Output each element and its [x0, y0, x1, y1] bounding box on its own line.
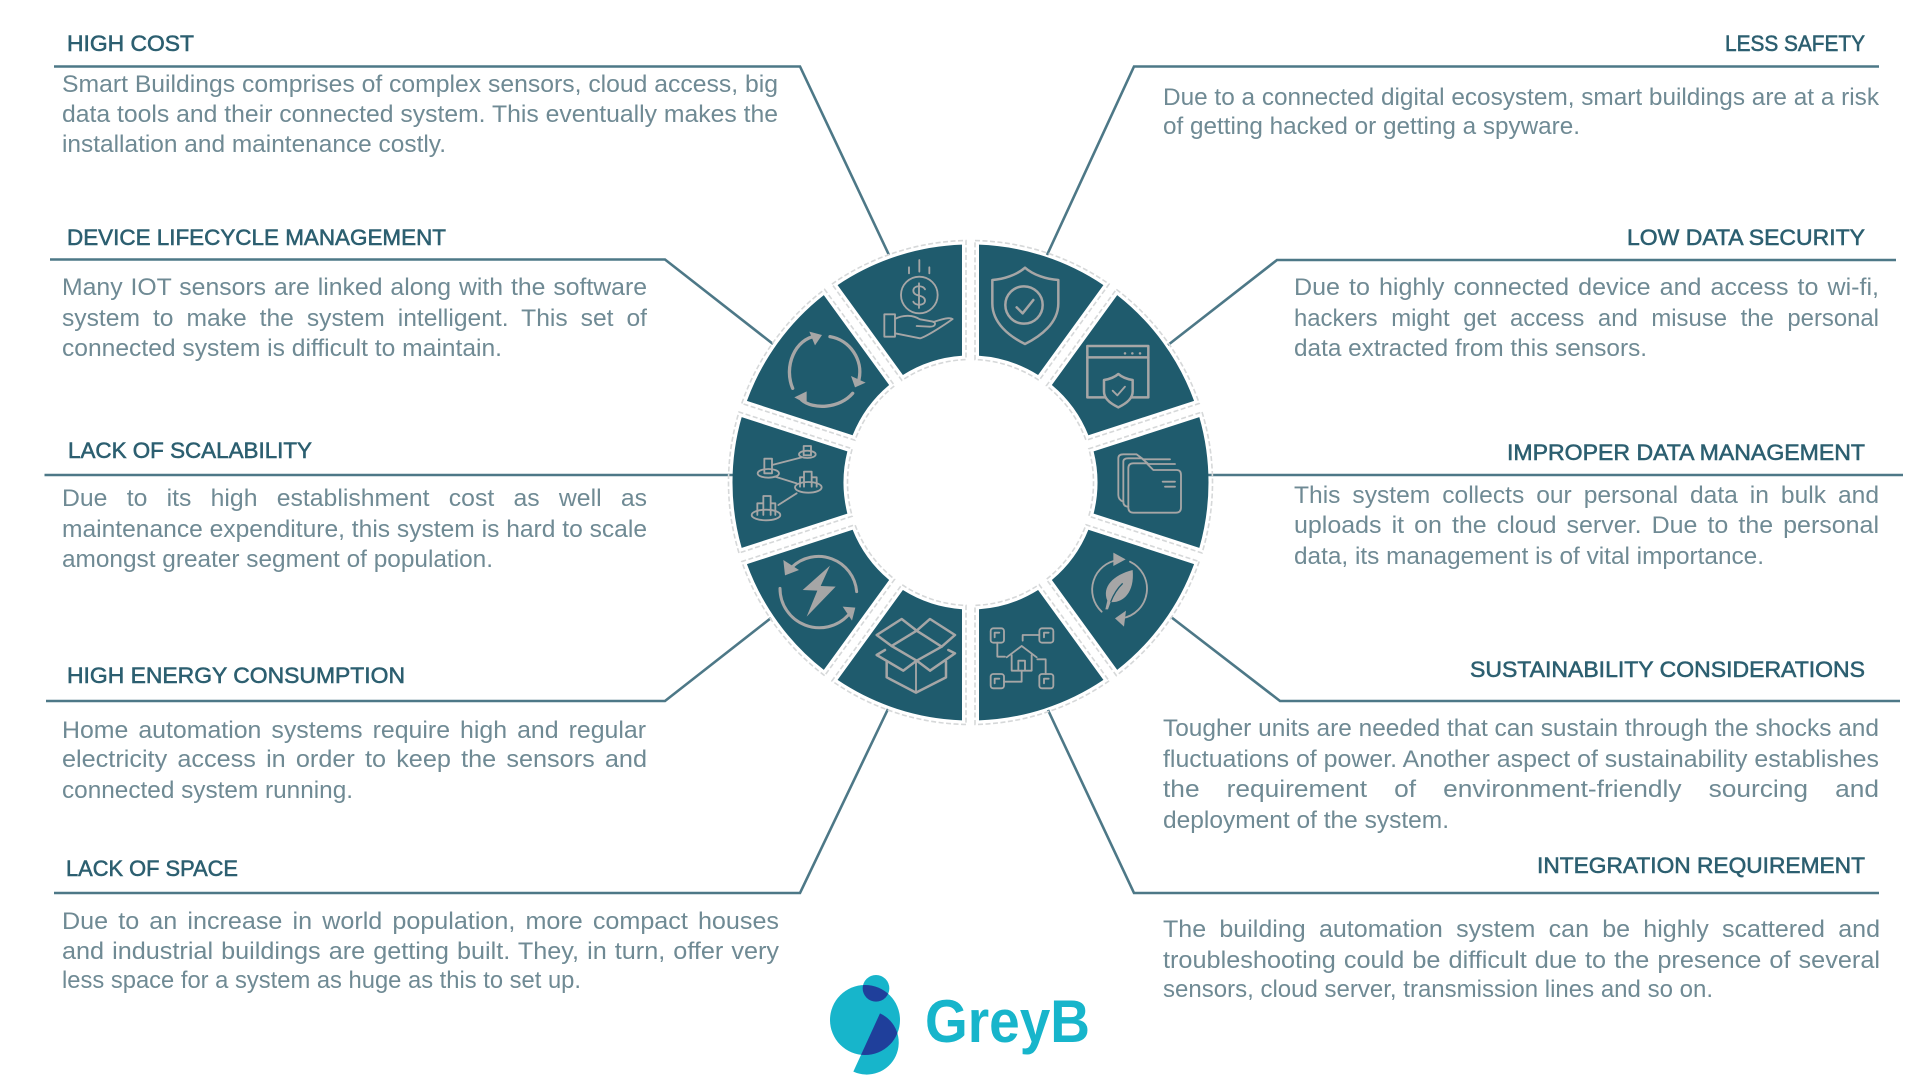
- icon: shield with check: [992, 268, 1058, 344]
- heading: lack of space: LACK OF SPACE: [66, 856, 238, 881]
- heading: scalability: LACK OF SCALABILITY: [68, 438, 312, 463]
- panel: sustainability considerations: [1163, 617, 1900, 834]
- panel: less safety: [1047, 31, 1880, 255]
- text block: high energy: electricity access in order to keep the sensors and: [62, 746, 647, 773]
- segment: high energy consumption: [716, 484, 907, 676]
- text block: high cost: data tools and their connected system. This eventually makes the: [62, 101, 778, 128]
- panel: device lifecycle management: [50, 225, 773, 362]
- icon: hand holding coin: [884, 260, 953, 338]
- leader line: device lifecycle: [50, 260, 773, 344]
- icon: browser window with shield: [1087, 346, 1148, 407]
- text block: device lifecycle: [62, 274, 647, 362]
- panel: lack of space: [54, 709, 888, 994]
- text block: device lifecycle: system to make the system intelligent. This set of: [62, 305, 647, 332]
- text block: sustainability: [1163, 715, 1879, 834]
- logo wordmark: GreyB: [925, 988, 1090, 1055]
- leader line: scalability: [44, 474, 740, 476]
- text block: low data security: hackers might get access and misuse the personal: [1294, 305, 1879, 332]
- segment: lack of space: [832, 585, 966, 724]
- icon: cycle of three arrows: [789, 332, 866, 406]
- text block: lack of space: Due to an increase in world population, more compact houses: [62, 908, 779, 935]
- text block: high energy: Home automation systems require high and regular: [62, 717, 646, 744]
- text block: high cost: installation and maintenance costly.: [62, 131, 446, 158]
- text block: sustainability: fluctuations of power. Another aspect of sustainability establishes: [1163, 746, 1879, 773]
- heading: less safety: LESS SAFETY: [1725, 31, 1865, 56]
- chart: ten-segment ring: [698, 205, 1243, 760]
- text block: high energy: connected system running.: [62, 777, 353, 804]
- text block: high cost: Smart Buildings comprises of complex sensors, cloud access, big: [62, 71, 778, 98]
- icon: lightning bolt with arrows: [780, 556, 857, 628]
- text block: device lifecycle: connected system is difficult to maintain.: [62, 335, 502, 362]
- icon: stack of folders: [1118, 454, 1181, 513]
- leader line: high energy: [46, 618, 771, 701]
- icon: connected home network: [991, 628, 1053, 688]
- text block: sustainability: the requirement of environment-friendly sourcing and: [1163, 776, 1879, 803]
- leader line: low data security: [1168, 260, 1896, 345]
- text block: scalability: amongst greater segment of population.: [62, 546, 493, 573]
- heading: device lifecycle: DEVICE LIFECYCLE MANAGEMENT: [67, 225, 446, 250]
- text block: integration: troubleshooting could be difficult due to the presence of several: [1163, 947, 1880, 974]
- icon: leaf with recycling arrows: [1092, 553, 1147, 627]
- leader line: high cost: [54, 66, 889, 255]
- logo: GreyB: [830, 975, 1090, 1075]
- segment: device lifecycle management: [742, 276, 916, 447]
- panel: integration requirement: [1048, 710, 1880, 1003]
- icon: open box: [877, 619, 955, 693]
- panel: high energy consumption: [46, 618, 771, 804]
- leader line: less safety: [1047, 66, 1879, 255]
- icon: linked bar-chart nodes: [752, 446, 822, 520]
- text block: low data security: Due to highly connected device and access to wi-fi,: [1294, 274, 1879, 301]
- text block: integration: sensors, cloud server, transmission lines and so on.: [1163, 976, 1713, 1003]
- text block: less safety: of getting hacked or getting a spyware.: [1163, 113, 1580, 140]
- text block: high cost: [62, 71, 778, 158]
- text block: lack of space: and industrial buildings are getting built. They, in turn, offer very: [62, 938, 779, 965]
- text block: device lifecycle: Many IOT sensors are linked along with the software: [62, 274, 647, 301]
- segment: less safety: [975, 241, 1109, 380]
- logo mark: [830, 975, 900, 1075]
- leader line: lack of space: [54, 709, 888, 893]
- text block: scalability: Due to its high establishment cost as well as: [62, 485, 647, 512]
- text block: integration: The building automation system can be highly scattered and: [1163, 916, 1880, 943]
- heading: improper data: IMPROPER DATA MANAGEMENT: [1507, 440, 1865, 465]
- text block: less safety: [1163, 84, 1880, 140]
- text block: improper data: data, its management is of vital importance.: [1294, 543, 1764, 570]
- text block: scalability: [62, 485, 647, 573]
- heading: low data security: LOW DATA SECURITY: [1627, 225, 1865, 250]
- text block: lack of space: [62, 908, 779, 994]
- text block: sustainability: Tougher units are needed that can sustain through the shocks and: [1163, 715, 1879, 742]
- text block: improper data: [1294, 482, 1879, 570]
- heading: high cost: HIGH COST: [67, 31, 194, 56]
- text block: sustainability: deployment of the system.: [1163, 807, 1449, 834]
- text block: improper data: This system collects our personal data in bulk and: [1294, 482, 1879, 509]
- text block: high energy: [62, 717, 647, 804]
- text block: scalability: maintenance expenditure, this system is hard to scale: [62, 516, 647, 543]
- text block: low data security: data extracted from this sensors.: [1294, 335, 1647, 362]
- segment: improper data management: [1069, 412, 1243, 583]
- panel: high cost: [54, 31, 889, 255]
- leader line: integration: [1048, 710, 1879, 893]
- panel: improper data management: [1200, 440, 1903, 570]
- heading: sustainability: SUSTAINABILITY CONSIDERATIONS: [1470, 657, 1865, 682]
- leader line: sustainability: [1171, 617, 1900, 701]
- segment: integration requirement: [918, 568, 1109, 760]
- heading: integration: INTEGRATION REQUIREMENT: [1537, 853, 1865, 878]
- text block: lack of space: less space for a system as huge as this to set up.: [62, 967, 581, 994]
- segment: high cost: [832, 205, 1023, 397]
- leader line: improper data: [1200, 474, 1903, 476]
- text block: less safety: Due to a connected digital ecosystem, smart buildings are at a risk: [1163, 84, 1880, 111]
- text block: low data security: [1294, 274, 1879, 362]
- segment: low data security: [1034, 289, 1225, 481]
- panel: low data security: [1168, 225, 1896, 362]
- heading: high energy: HIGH ENERGY CONSUMPTION: [67, 663, 405, 688]
- segment: sustainability considerations: [1025, 518, 1199, 689]
- text block: improper data: uploads it on the cloud server. Due to the personal: [1294, 512, 1879, 539]
- segment: lack of scalability: [698, 382, 872, 553]
- panel: lack of scalability: [44, 438, 740, 573]
- text block: integration: [1163, 916, 1880, 1003]
